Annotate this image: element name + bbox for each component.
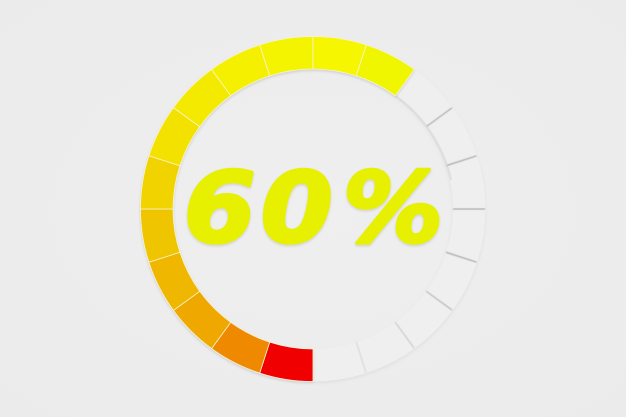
digit 6: 6 (184, 151, 256, 265)
empty segment tick lines (356, 96, 485, 372)
segment 9: bright yellow (212, 45, 270, 96)
segment 10: bright yellow (260, 36, 313, 76)
percent sign: % (343, 153, 443, 265)
percentage value (184, 151, 443, 265)
segment 4: amber yellow (149, 252, 200, 310)
segment 12: lemon (356, 45, 414, 96)
digit 0: 0 (261, 151, 333, 265)
segment 11: lemon (313, 36, 366, 76)
filled gauge segments (140, 36, 414, 382)
segment 2: orange (212, 322, 270, 373)
empty gauge segments (313, 69, 486, 382)
segment 3: amber (173, 291, 231, 349)
segment 7: yellow (149, 108, 200, 166)
segment 8: yellow (173, 69, 231, 127)
segment 5: golden (140, 209, 180, 262)
segment 1: red (260, 342, 313, 382)
segment 6: golden yellow (140, 156, 180, 209)
